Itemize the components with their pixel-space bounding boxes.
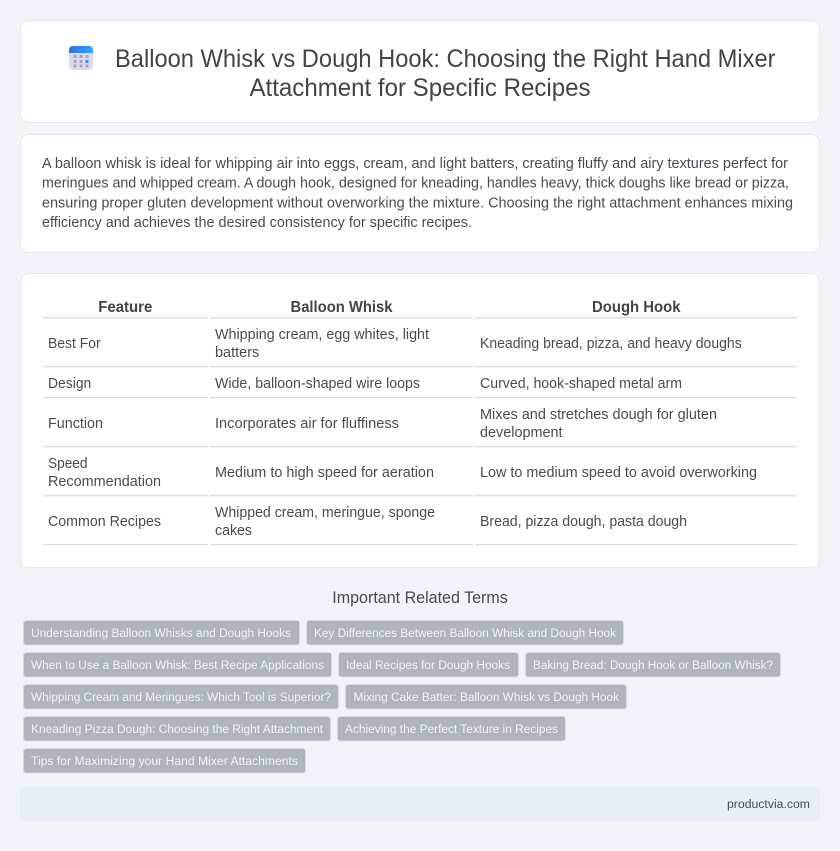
- tags: related terms: Whipping Cream and Meringues: Which Tool is Superior?: [31, 690, 331, 704]
- title: [115, 45, 776, 102]
- tags: related terms: Key Differences Between Balloon Whisk and Dough Hook: [314, 626, 617, 640]
- row: design: Curved, hook-shaped metal arm: [480, 376, 682, 392]
- panel: description: [20, 134, 820, 252]
- row: speed recommendation: Medium to high speed for aeration: [215, 465, 434, 481]
- footer: [20, 787, 820, 821]
- row: common recipes: cakes: [215, 523, 252, 539]
- row: design: Design: [48, 376, 91, 392]
- row: common recipes: Whipped cream, meringue, sponge: [215, 505, 435, 521]
- row: function: Mixes and stretches dough for gluten: [480, 407, 717, 423]
- row: best for: Best For: [48, 336, 101, 352]
- row: function: development: [480, 425, 562, 441]
- tags: related terms: Baking Bread: Dough Hook or Balloon Whisk?: [533, 658, 773, 672]
- row: speed recommendation: Low to medium speed to avoid overworking: [480, 465, 757, 481]
- panel: comparison table: [20, 274, 820, 568]
- table header: Dough Hook: [592, 299, 681, 316]
- footer: productvia.com: [727, 797, 810, 811]
- row: best for: Whipping cream, egg whites, light: [215, 327, 429, 343]
- tags: related terms: [24, 620, 780, 773]
- row: function: [48, 407, 717, 441]
- tags: related terms: Ideal Recipes for Dough Hooks: [346, 658, 510, 672]
- row: best for: batters: [215, 345, 259, 361]
- text block: description: efficiency and achieves the desired consistency for specific recipes.: [42, 215, 472, 231]
- text block: description: meringues and whipped cream. A dough hook, designed for kneading, handles heavy, thick doughs like bread or pizza,: [42, 176, 789, 192]
- row: speed recommendation: [48, 456, 757, 490]
- table header: Balloon Whisk: [290, 299, 393, 316]
- text block: description: [42, 156, 793, 231]
- title: Attachment for Specific Recipes: [250, 74, 590, 102]
- tags: related terms: Tips for Maximizing your Hand Mixer Attachments: [31, 754, 298, 768]
- tags: related terms: Achieving the Perfect Texture in Recipes: [345, 722, 558, 736]
- row: common recipes: [48, 505, 687, 539]
- icon: calendar: [69, 46, 93, 70]
- row: best for: [48, 327, 742, 361]
- tags: related terms: Kneading Pizza Dough: Choosing the Right Attachment: [31, 722, 324, 736]
- tags: related terms: When to Use a Balloon Whisk: Best Recipe Applications: [31, 658, 324, 672]
- row: common recipes: Bread, pizza dough, pasta dough: [480, 514, 687, 530]
- table header: [98, 299, 681, 316]
- row: design: [48, 376, 682, 392]
- heading: important related terms: Important Related Terms: [332, 589, 508, 607]
- row: speed recommendation: Speed: [48, 456, 88, 472]
- row: best for: Kneading bread, pizza, and heavy doughs: [480, 336, 742, 352]
- tags: related terms: Mixing Cake Batter: Balloon Whisk vs Dough Hook: [354, 690, 620, 704]
- row: function: Function: [48, 416, 103, 432]
- row: common recipes: Common Recipes: [48, 514, 161, 530]
- panel: header: [20, 20, 820, 122]
- tags: related terms: Understanding Balloon Whisks and Dough Hooks: [31, 626, 291, 640]
- title: Balloon Whisk vs Dough Hook: Choosing the Right Hand Mixer: [115, 45, 776, 73]
- table header: Feature: [98, 299, 152, 316]
- text block: description: ensuring proper gluten development without overworking the mixture. Choosing the right attachment enhances mixing: [42, 196, 793, 212]
- row: design: Wide, balloon-shaped wire loops: [215, 376, 420, 392]
- text block: description: A balloon whisk is ideal for whipping air into eggs, cream, and light batters, creating fluffy and airy textures perfect for: [42, 156, 788, 172]
- row: speed recommendation: Recommendation: [48, 474, 161, 490]
- row: function: Incorporates air for fluffiness: [215, 416, 399, 432]
